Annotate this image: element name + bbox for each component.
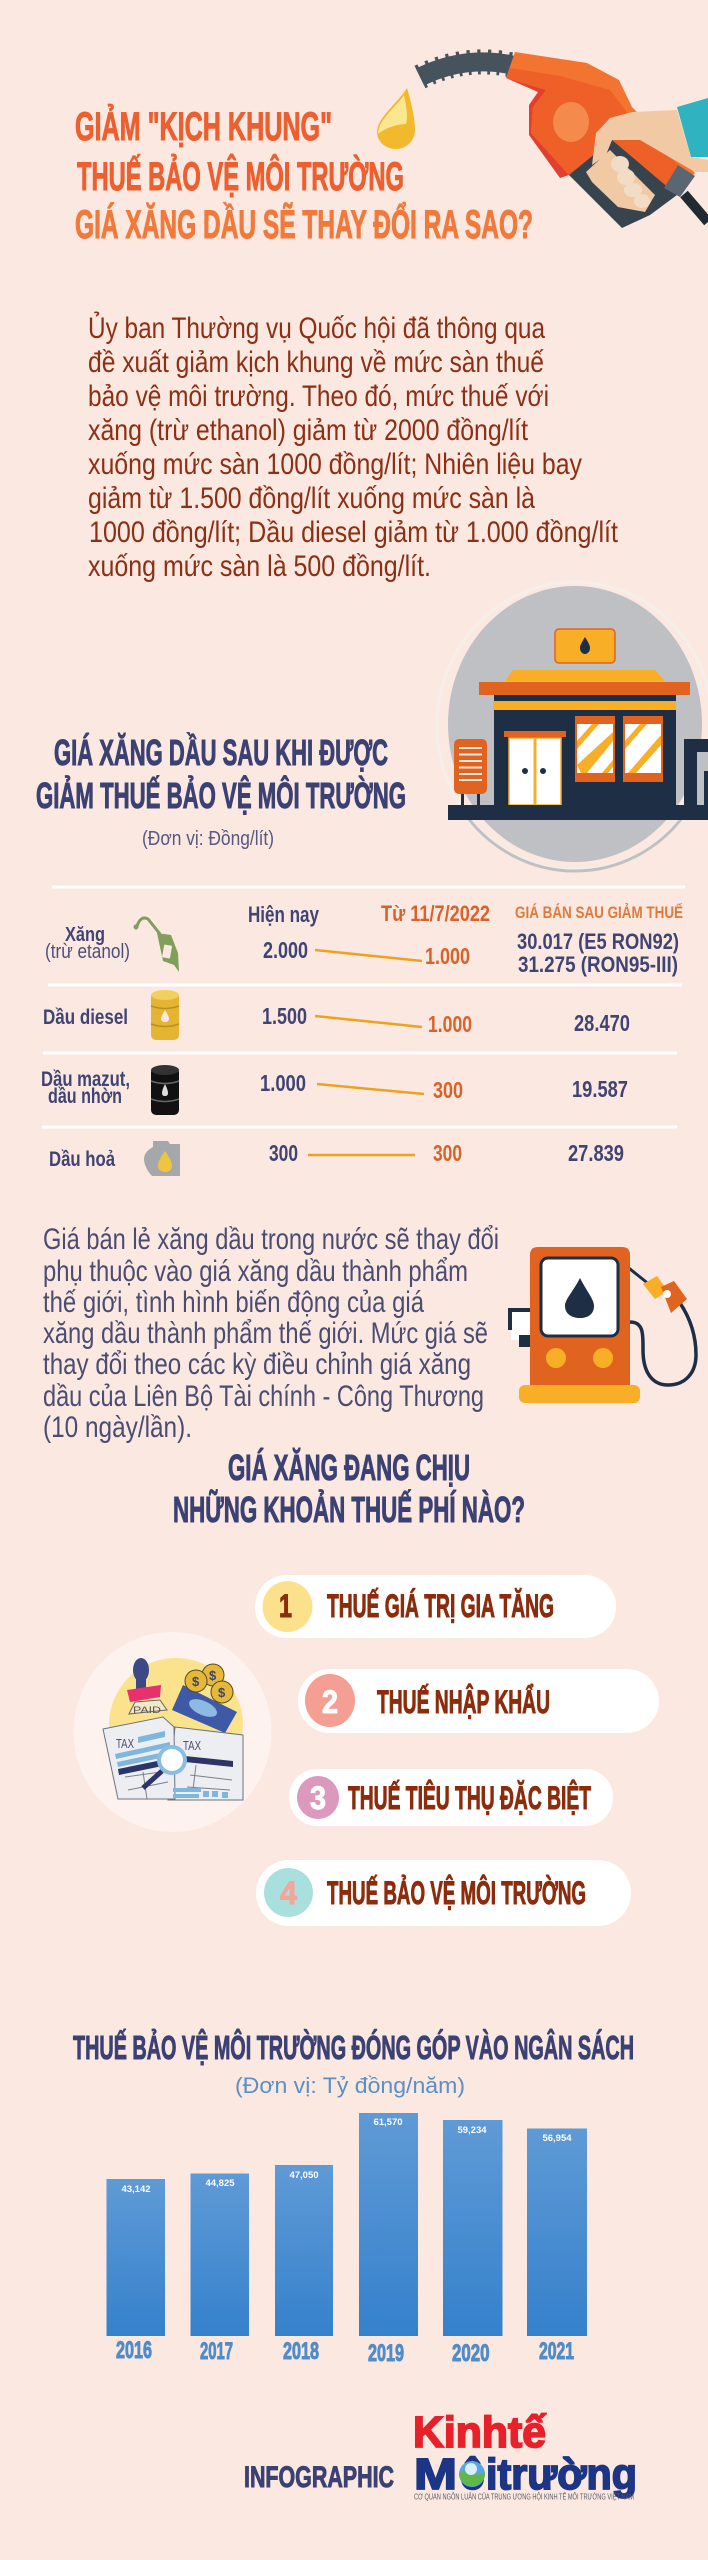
logo: Kinh tế Môi trường: Kinhtế <box>413 2408 547 2457</box>
row: dầu hoả: Dầu hoả <box>49 1148 115 1171</box>
second paragraph: thay đổi theo các kỳ điều chỉnh giá xăng <box>43 1348 471 1381</box>
row: dầu diesel: 1.000 <box>428 1011 472 1037</box>
heading: fuel price after tax cut: GIẢM THUẾ BẢO VỆ MÔI TRƯỜNG <box>36 774 406 816</box>
icon: fuel nozzle with hand <box>420 52 708 228</box>
second paragraph: (10 ngày/lần). <box>43 1411 192 1444</box>
row: dầu diesel: 1.500 <box>262 1003 307 1029</box>
bar chart <box>106 2113 587 2367</box>
icon: tax documents: TAX <box>183 1738 201 1753</box>
row: xăng: 2.000 <box>263 937 308 963</box>
row: xăng: 31.275 (RON95-III) <box>518 952 678 977</box>
intro paragraph: Ủy ban Thường vụ Quốc hội đã thông qua <box>88 311 545 345</box>
icon: tax documents: PAID <box>133 1705 162 1715</box>
column headers <box>248 901 683 927</box>
row: xăng <box>45 918 679 977</box>
row: xăng: 30.017 (E5 RON92) <box>517 929 679 954</box>
row: dầu hoả: 300 <box>433 1140 462 1166</box>
bar chart: 43,142 <box>121 2184 151 2195</box>
icon: gas station in circle <box>437 582 708 871</box>
row: dầu diesel: 28.470 <box>574 1010 630 1036</box>
logo: Kinh tế Môi trường: itrường <box>486 2450 637 2499</box>
title <box>75 103 533 247</box>
bar chart: 59,234 <box>457 2125 487 2136</box>
tax pill 3 <box>289 1769 613 1826</box>
icon: tax documents: $ <box>192 1674 200 1689</box>
row: xăng: 1.000 <box>425 943 470 969</box>
row: dầu mazut: 300 <box>433 1077 463 1103</box>
tax pill 1: 1 <box>279 1588 292 1624</box>
tax pill 1 <box>255 1575 616 1638</box>
row: dầu mazut <box>41 1065 628 1115</box>
row: dầu diesel <box>43 990 630 1040</box>
bar chart: 2017 <box>200 2338 233 2365</box>
bar chart: 2016 <box>116 2337 152 2364</box>
column headers: Từ 11/7/2022 <box>381 901 490 926</box>
tax pill 2: 2 <box>322 1684 338 1720</box>
tax pill 3: 3 <box>310 1780 326 1816</box>
tax pill 2: THUẾ NHẬP KHẨU <box>377 1684 550 1720</box>
icon: tax documents: $ <box>209 1668 217 1683</box>
bar chart: 61,570 <box>373 2117 403 2128</box>
heading: which taxes apply <box>173 1447 525 1530</box>
logo: Kinh tế Môi trường <box>413 2408 637 2502</box>
row: dầu mazut: 1.000 <box>260 1070 306 1096</box>
infographic label: INFOGRAPHIC <box>244 2461 394 2494</box>
unit note: (Đơn vị: Đồng/lít) <box>142 828 274 850</box>
chart unit note: (Đơn vị: Tỷ đồng/năm) <box>235 2073 465 2098</box>
row: dầu mazut: Dầu mazut, <box>41 1068 130 1091</box>
row: dầu mazut: 19.587 <box>572 1076 628 1102</box>
logo: Kinh tế Môi trường: ô <box>460 2450 485 2499</box>
row: dầu mazut: dầu nhờn <box>48 1085 122 1108</box>
bar chart: 2020 <box>452 2340 490 2367</box>
second paragraph: Giá bán lẻ xăng dầu trong nước sẽ thay đổi <box>43 1223 499 1256</box>
row: xăng: Xăng <box>65 924 105 946</box>
row: dầu hoả <box>49 1140 624 1176</box>
row: dầu hoả: 300 <box>269 1140 298 1166</box>
intro paragraph: giảm từ 1.500 đồng/lít xuống mức sàn là <box>88 482 535 515</box>
bar chart: 2019 <box>368 2340 404 2367</box>
intro paragraph: xuống mức sàn 1000 đồng/lít; Nhiên liệu bay <box>88 448 582 481</box>
second paragraph: thế giới, tình hình biến động của giá <box>43 1286 424 1319</box>
intro paragraph: xăng (trừ ethanol) giảm từ 2000 đồng/lít <box>88 414 529 447</box>
icon: tax documents: TAX <box>116 1736 134 1751</box>
intro paragraph: đề xuất giảm kịch khung về mức sàn thuế <box>88 346 544 379</box>
tax pill 4: 4 <box>280 1875 297 1911</box>
tax pill 1: THUẾ GIÁ TRỊ GIA TĂNG <box>327 1588 554 1624</box>
second paragraph: xăng dầu thành phẩm thế giới. Mức giá sẽ <box>43 1317 488 1350</box>
second paragraph: phụ thuộc vào giá xăng dầu thành phẩm <box>43 1255 468 1288</box>
title: THUẾ BẢO VỆ MÔI TRƯỜNG <box>77 153 404 199</box>
heading: fuel price after tax cut <box>36 732 406 816</box>
bar chart: 2021 <box>539 2338 574 2365</box>
heading: which taxes apply: GIÁ XĂNG ĐANG CHỊU <box>228 1447 470 1488</box>
icon: tax documents <box>74 1632 272 1832</box>
logo: Kinh tế Môi trường: M <box>414 2450 457 2499</box>
bar chart: 56,954 <box>542 2133 572 2144</box>
icon: fuel pump <box>510 1247 696 1403</box>
icon: oil drop <box>377 88 415 149</box>
bar chart: 44,825 <box>205 2178 235 2189</box>
bar chart: 47,050 <box>289 2170 319 2181</box>
heading: fuel price after tax cut: GIÁ XĂNG DẦU SAU KHI ĐƯỢC <box>54 732 388 773</box>
row: dầu hoả: 27.839 <box>568 1140 624 1166</box>
title: GIẢM "KỊCH KHUNG" <box>75 103 332 149</box>
intro paragraph: 1000 đồng/lít; Dầu diesel giảm từ 1.000 đồng/lít <box>89 516 619 549</box>
bar chart: 2018 <box>283 2338 319 2365</box>
second paragraph: dầu của Liên Bộ Tài chính - Công Thương <box>43 1380 484 1413</box>
tax pill 4 <box>256 1860 631 1926</box>
icon: tax documents: $ <box>218 1685 226 1700</box>
intro paragraph: bảo vệ môi trường. Theo đó, mức thuế với <box>88 380 549 413</box>
second paragraph <box>43 1223 499 1444</box>
row: xăng: (trừ etanol) <box>45 941 130 963</box>
row: dầu diesel: Dầu diesel <box>43 1006 128 1029</box>
tax pill 2 <box>298 1669 659 1733</box>
fuel price table <box>41 886 685 1176</box>
intro paragraph: xuống mức sàn là 500 đồng/lít. <box>88 550 431 583</box>
intro paragraph <box>88 311 619 583</box>
column headers: Hiện nay <box>248 902 320 927</box>
